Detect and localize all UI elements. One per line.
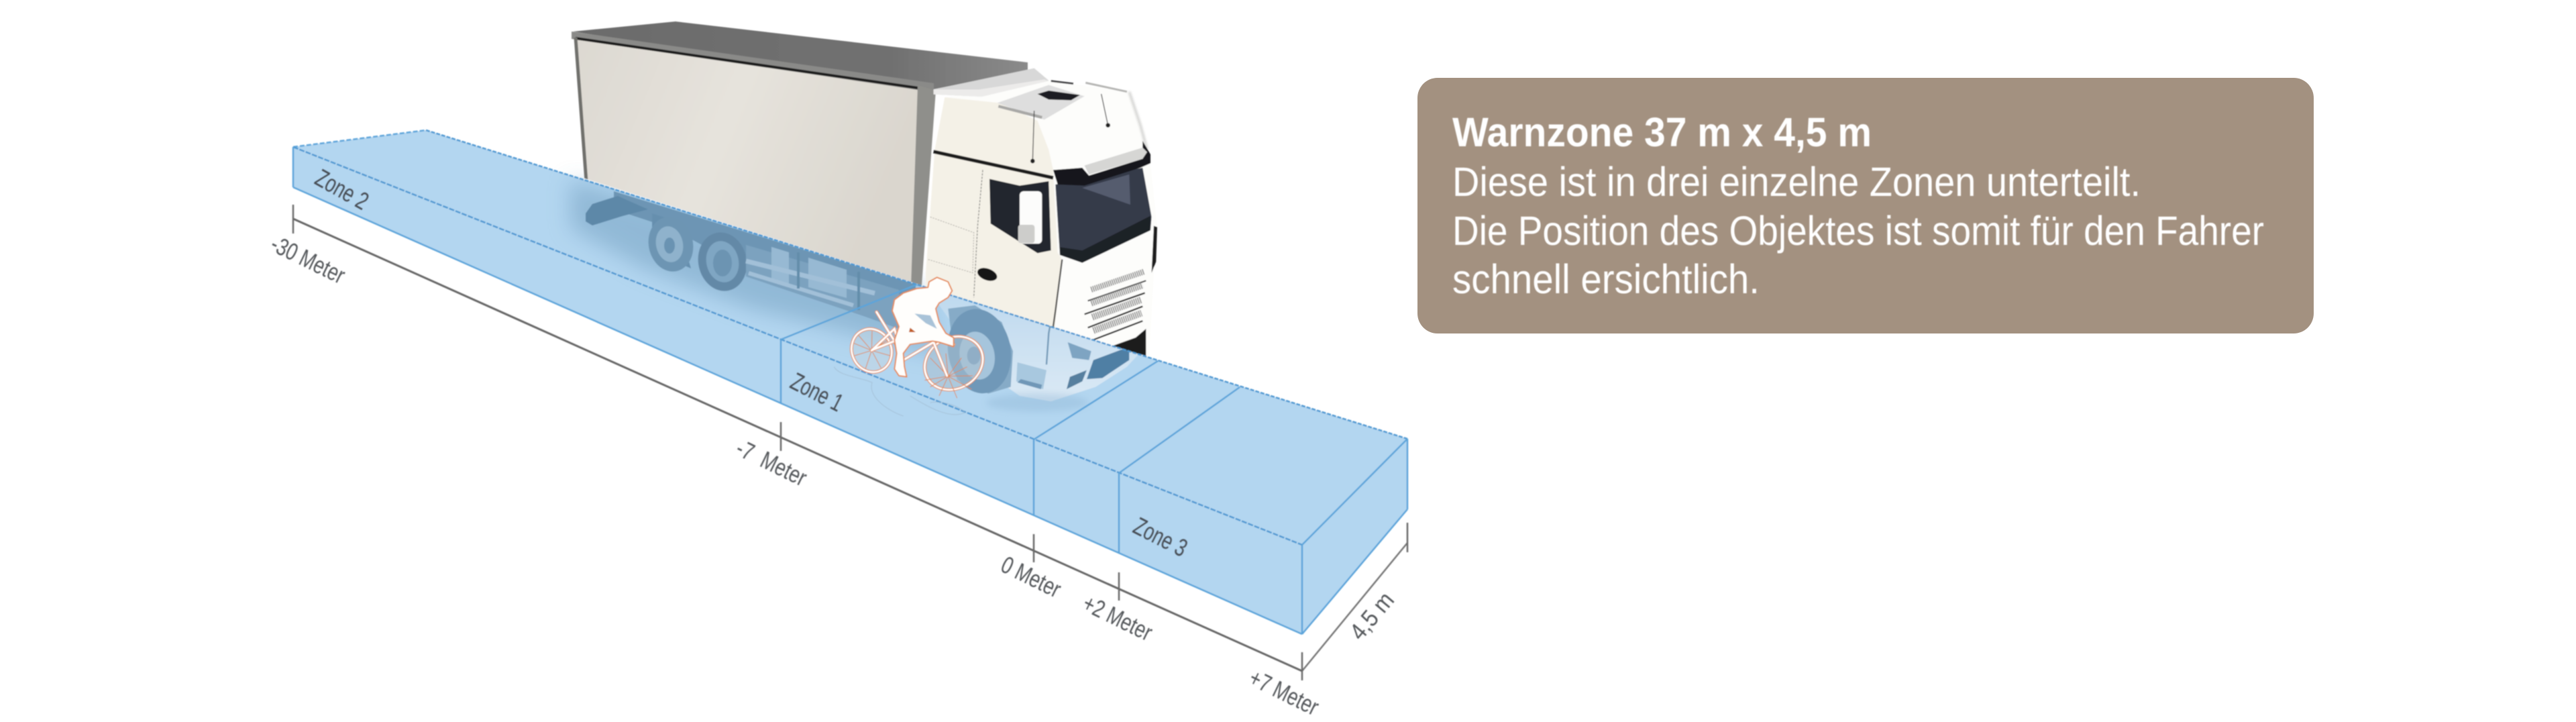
label: width 4,5 m: 4,5 m (1344, 586, 1399, 645)
panel body text: schnell ersichtlich. (1452, 256, 1760, 302)
axis labels (266, 229, 1399, 721)
cargo box side (575, 37, 918, 285)
warning zone infographic (271, 21, 2314, 715)
diagram: zone box and truck (293, 21, 1407, 680)
label: zone 1: Zone 1 (786, 368, 848, 417)
label: -30 meter: -30 Meter (266, 229, 350, 289)
cyclist shadow (834, 367, 965, 416)
truck cab lower part seen through zone (926, 287, 1140, 411)
cyclist (845, 277, 993, 400)
truck chassis seen through zone (570, 180, 939, 356)
label: +2 meter: +2 Meter (1079, 589, 1157, 646)
truck above zone (572, 21, 1157, 356)
panel body text: Die Position des Objektes ist somit für den Fahrer (1452, 208, 2264, 254)
panel background (1417, 78, 2314, 333)
cargo box roof (573, 21, 1028, 89)
panel: warning zone description (1417, 78, 2314, 333)
zone box fill (293, 130, 1407, 634)
zone labels (311, 164, 1192, 562)
cargo box edges (572, 32, 936, 285)
label: zone 3: Zone 3 (1129, 512, 1192, 562)
panel body text (1452, 159, 2264, 302)
zone edge lines (293, 130, 1407, 634)
dimension axis (293, 205, 1407, 680)
rider body (892, 277, 954, 377)
label: zone 2: Zone 2 (311, 164, 373, 215)
bike wheels (845, 322, 993, 400)
panel body text: Diese ist in drei einzelne Zonen unterteilt. (1452, 159, 2141, 205)
panel heading: Warnzone 37 m x 4,5 m (1452, 109, 1872, 155)
label: 0 meter: 0 Meter (997, 551, 1065, 603)
truck cab (926, 68, 1157, 356)
label: -7 meter: -7 Meter (732, 434, 812, 492)
bike frame (871, 312, 954, 376)
